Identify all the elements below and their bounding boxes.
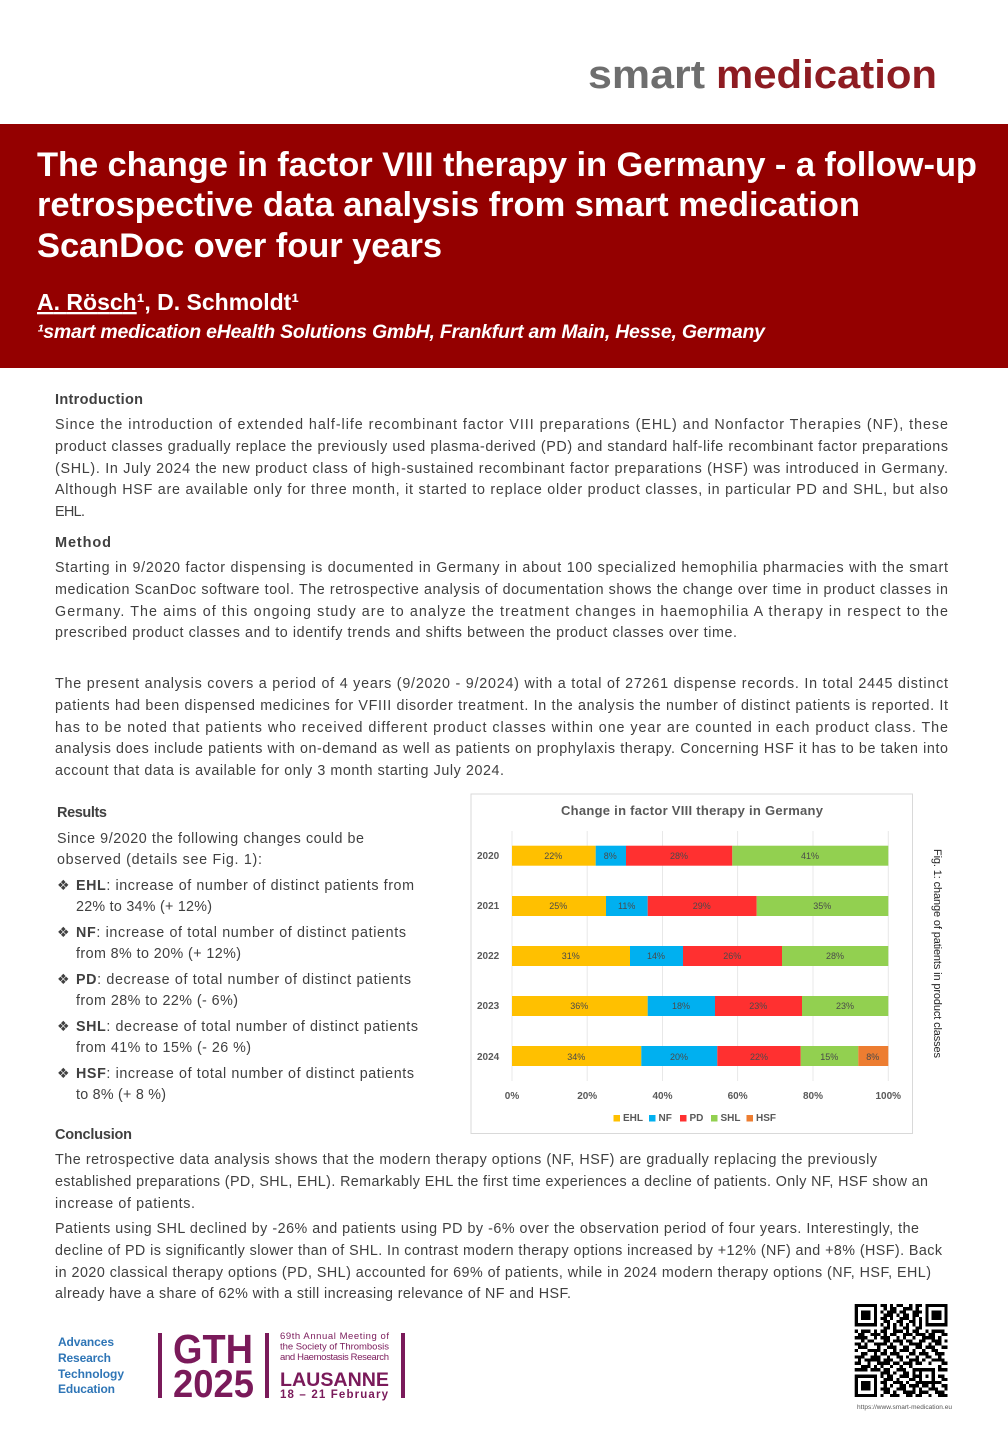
title xyxy=(37,146,977,265)
bar 2020: 22% xyxy=(544,851,562,861)
bullet: SHL: ❖ xyxy=(57,1019,70,1035)
bar 2024: 34% xyxy=(567,1052,585,1062)
text: method first paragraph: prescribed product classes and to identify trends and shifts between the product classes over time. xyxy=(55,625,737,641)
bar 2024: 22% xyxy=(750,1052,768,1062)
bullet: SHL: from 41% to 15% (- 26 %) xyxy=(76,1040,251,1056)
logo: GTH 2025 Lausanne: 69th Annual Meeting of xyxy=(280,1331,389,1342)
bar 2021 xyxy=(477,896,888,916)
text: introduction body: EHL. xyxy=(55,504,85,520)
bar 2024: 8% xyxy=(866,1052,879,1062)
bullet: NF xyxy=(57,925,406,962)
bar 2022: 31% xyxy=(562,951,580,961)
bar 2022: 14% xyxy=(647,951,665,961)
bar 2020: 28% xyxy=(670,851,688,861)
bar 2024: 15% xyxy=(820,1052,838,1062)
x axis labels: 80% xyxy=(803,1091,823,1102)
logo: GTH 2025 Lausanne: 18 – 21 February xyxy=(280,1389,389,1401)
bar 2020: 2020 xyxy=(477,851,500,862)
section: conclusion xyxy=(55,1127,943,1302)
logo: GTH 2025 Lausanne: and Haemostasis Research xyxy=(280,1352,389,1363)
logo: ARTE: Research xyxy=(58,1351,111,1365)
text: method first paragraph: medication ScanDoc software tool. The retrospective analysis of documentation shows the change over time in product classes in xyxy=(55,582,948,598)
text: conclusion first paragraph: The retrospective data analysis shows that the modern therapy options (NF, HSF) are gradually replacing the previously xyxy=(55,1152,878,1168)
logo: GTH 2025 Lausanne: LAUSANNE xyxy=(280,1369,389,1391)
heading: method: Method xyxy=(55,535,111,551)
bullet: NF: NF: increase of total number of distinct patients xyxy=(76,925,406,941)
text: method second paragraph: has to be noted that patients who received different product classes within one year are counted in each product class. The xyxy=(55,720,948,736)
x axis labels: 0% xyxy=(505,1091,519,1102)
text: introduction body: Since the introduction of extended half-life recombinant factor VIII preparations (EHL) and Nonfactor Therapies (NF), these xyxy=(55,417,948,433)
bullet: PD xyxy=(57,972,411,1009)
bar 2021: 35% xyxy=(813,901,831,911)
bullet: HSF: to 8% (+ 8 %) xyxy=(76,1087,166,1103)
text: conclusion second paragraph xyxy=(55,1221,943,1302)
bullet: HSF: ❖ xyxy=(57,1066,70,1082)
bullet: EHL xyxy=(57,878,414,915)
title: retrospective data analysis from smart medication xyxy=(37,186,860,224)
affiliation: ¹smart medication eHealth Solutions GmbH, Frankfurt am Main, Hesse, Germany xyxy=(37,321,766,343)
text: method second paragraph: patients had been dispensed medicines for VFIII disorder treatment. In the analysis the number of distinct patients is reported. It xyxy=(55,698,948,714)
bar 2020: 41% xyxy=(801,851,819,861)
x axis labels: 60% xyxy=(728,1091,748,1102)
bullet: NF: ❖ xyxy=(57,925,70,941)
bullet: EHL: 22% to 34% (+ 12%) xyxy=(76,899,212,915)
title: ScanDoc over four years xyxy=(37,227,442,265)
text: method second paragraph: The present analysis covers a period of 4 years (9/2020 - 9/2024) with a total of 27261 dispense records. In total 2445 distinct xyxy=(55,676,948,692)
text: introduction body: product classes gradually replace the previously used plasma-derived (PD) and standard half-life recombinant factor preparations xyxy=(55,439,948,455)
text: conclusion second paragraph: decline of PD is significantly slower than of SHL. In contrast modern therapy options increased by +12% (NF) and +8% (HSF). Back xyxy=(55,1243,943,1259)
bullet: SHL: SHL: decrease of total number of distinct patients xyxy=(76,1019,418,1035)
logo: smart medication: medication xyxy=(716,53,937,97)
bullet: PD: ❖ xyxy=(57,972,70,988)
stacked bar chart: change in factor VIII therapy xyxy=(471,794,912,1134)
section: results xyxy=(57,805,418,1103)
bar 2023: 36% xyxy=(570,1001,588,1011)
logo: smart medication: smart xyxy=(588,53,705,97)
chart title: Change in factor VIII therapy in Germany xyxy=(561,803,824,818)
bar 2020: 8% xyxy=(604,851,617,861)
legend: EHL xyxy=(623,1113,643,1124)
bullet: HSF xyxy=(57,1066,414,1103)
legend xyxy=(614,1113,776,1124)
bullet: EHL: EHL: increase of number of distinct patients from xyxy=(76,878,414,894)
legend: PD xyxy=(690,1113,703,1124)
logo: smart medication xyxy=(588,53,937,97)
logo: GTH 2025 Lausanne: 2025 xyxy=(173,1363,254,1406)
header band xyxy=(0,124,1008,368)
title: The change in factor VIII therapy in Germany - a follow-up xyxy=(37,146,977,184)
text: method first paragraph xyxy=(55,560,948,641)
bar 2024 xyxy=(477,1046,888,1066)
authors: A. Rösch¹, D. Schmoldt¹ xyxy=(37,289,299,315)
section: introduction xyxy=(55,392,948,520)
bar 2022: 28% xyxy=(826,951,844,961)
bullet: EHL: ❖ xyxy=(57,878,70,894)
bar 2023: 2023 xyxy=(477,1001,500,1012)
x axis labels xyxy=(505,1091,901,1102)
legend: NF xyxy=(658,1113,672,1124)
bullet: PD: from 28% to 22% (- 6%) xyxy=(76,993,238,1009)
bar 2023: 18% xyxy=(672,1001,690,1011)
text: method second paragraph: account that data is available for only 3 month starting July 2024. xyxy=(55,763,504,779)
heading: results: Results xyxy=(57,805,107,821)
logo: GTH 2025 Lausanne: the Society of Thrombosis xyxy=(280,1342,389,1352)
bar 2022: 26% xyxy=(723,951,741,961)
text: results intro: observed (details see Fig. 1): xyxy=(57,852,262,868)
text: introduction body: (SHL). In July 2024 the new product class of high-sustained recombinant factor preparations (HSF) was introduced in Germany. xyxy=(55,461,948,477)
text: results intro: Since 9/2020 the following changes could be xyxy=(57,831,364,847)
bullet: SHL xyxy=(57,1019,418,1056)
bar 2022: 2022 xyxy=(477,951,500,962)
x axis labels: 100% xyxy=(876,1091,901,1102)
text: conclusion second paragraph: already have a share of 62% with a still increasing relevance of NF and HSF. xyxy=(55,1286,571,1302)
bar 2023: 23% xyxy=(836,1001,854,1011)
text: introduction body: Although HSF are available only for three month, it started to replace older product classes, in particular PD and SHL, but also xyxy=(55,482,948,498)
heading: conclusion: Conclusion xyxy=(55,1127,132,1143)
bar 2021: 2021 xyxy=(477,901,500,912)
text: introduction body xyxy=(55,417,948,520)
logo: ARTE: Technology xyxy=(58,1367,124,1381)
legend: HSF xyxy=(756,1113,776,1124)
text: method first paragraph: Germany. The aims of this ongoing study are to analyze the treatment changes in haemophilia A therapy in respect to the xyxy=(55,604,948,620)
logo: GTH 2025 Lausanne: GTH xyxy=(173,1326,253,1372)
section: method xyxy=(55,535,948,779)
bullet: NF: from 8% to 20% (+ 12%) xyxy=(76,946,241,962)
text: results intro xyxy=(57,831,364,868)
text: conclusion second paragraph: in 2020 classical therapy options (PD, SHL) accounted for 69% of patients, while in 2024 modern therapy options (NF, HSF, EHL) xyxy=(55,1265,931,1281)
bar 2024: 20% xyxy=(670,1052,688,1062)
heading: introduction: Introduction xyxy=(55,392,143,408)
figure caption (rotated): Fig. 1: change of patients in product classes xyxy=(931,849,943,1058)
text: conclusion first paragraph xyxy=(55,1152,928,1212)
text: method first paragraph: Starting in 9/2020 factor dispensing is documented in Germany in about 100 specialized hemophilia pharmacies with the smart xyxy=(55,560,948,576)
text: method second paragraph xyxy=(55,676,948,779)
bar 2023 xyxy=(477,996,888,1016)
QR code xyxy=(854,1304,948,1397)
bar 2024: 2024 xyxy=(477,1052,500,1063)
text: method second paragraph: analysis does include patients with on-demand as well as patients on prophylaxis therapy. Concerning HSF it has to be taken into xyxy=(55,741,948,757)
x axis labels: 20% xyxy=(577,1091,597,1102)
x axis labels: 40% xyxy=(652,1091,673,1102)
logo: ARTE: Education xyxy=(58,1382,115,1396)
QR url: https://www.smart-medication.eu xyxy=(857,1404,952,1411)
bar 2023: 23% xyxy=(749,1001,767,1011)
logo: ARTE: Advances xyxy=(58,1335,114,1349)
logo: GTH 2025 Lausanne xyxy=(158,1326,405,1406)
bar 2021: 29% xyxy=(693,901,711,911)
text: conclusion second paragraph: Patients using SHL declined by -26% and patients using PD by -6% over the observation period of four years. Interestingly, the xyxy=(55,1221,919,1237)
bar 2021: 25% xyxy=(549,901,567,911)
text: conclusion first paragraph: established preparations (PD, SHL, EHL). Remarkably EHL the first time experiences a decline of patients. Only NF, HSF show an xyxy=(55,1174,928,1190)
bar 2021: 11% xyxy=(618,901,635,911)
bullet: HSF: HSF: increase of total number of distinct patients xyxy=(76,1066,414,1082)
bar 2022 xyxy=(477,946,888,966)
bullet: PD: PD: decrease of total number of distinct patients xyxy=(76,972,411,988)
text: conclusion first paragraph: increase of patients. xyxy=(55,1196,195,1212)
logo: ARTE xyxy=(58,1335,124,1396)
legend: SHL xyxy=(720,1113,740,1124)
bar 2020 xyxy=(477,846,888,866)
